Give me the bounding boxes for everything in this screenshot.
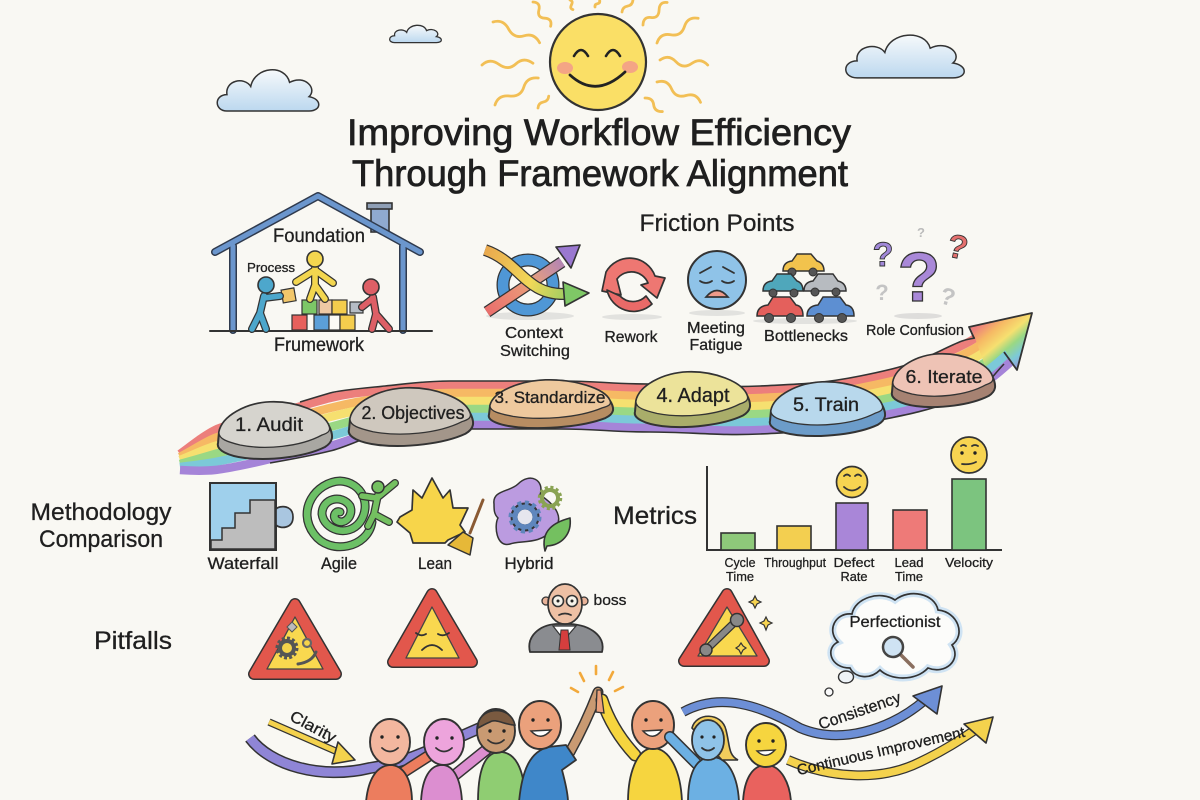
- icon: smiley above defect rate: [836, 466, 868, 498]
- axis labels: Velocity: [945, 555, 994, 570]
- team high five: [366, 666, 791, 800]
- icon: traffic jam cars: [753, 254, 857, 324]
- person: pink: [421, 719, 486, 800]
- callout: perfectionist thought cloud: [825, 594, 959, 696]
- icon: question marks: ?: [875, 280, 889, 305]
- label: rework: Rework: [604, 329, 658, 346]
- heading: pitfalls: Pitfalls: [94, 627, 172, 655]
- label: role confusion: Role Confusion: [866, 322, 964, 339]
- label: agile: Agile: [321, 554, 357, 573]
- axis labels: [724, 555, 994, 584]
- icon: hybrid blob gears and leaf: [494, 478, 570, 551]
- step 1: audit: [218, 402, 332, 459]
- step 6: iterate: 6. Iterate: [906, 367, 982, 387]
- label: meeting fatigue: [687, 320, 745, 354]
- label: context switching: Context: [505, 325, 564, 342]
- house outline: [210, 196, 432, 331]
- car: blue: [807, 297, 854, 322]
- figure: yellow builder: [296, 251, 333, 299]
- step 3: standardize: [489, 380, 613, 428]
- figure: blue builder: [252, 277, 280, 329]
- label: bottlenecks: Bottlenecks: [764, 328, 848, 345]
- heading: foundation: Foundation: [273, 226, 365, 247]
- axis labels: Throughput: [764, 555, 826, 570]
- callout: perfectionist thought cloud: Perfectionist: [850, 614, 941, 631]
- label: context switching: Switching: [500, 343, 570, 360]
- person: orange: [366, 719, 430, 800]
- axis labels: Time: [895, 569, 923, 584]
- icon: agile spiral: [307, 481, 395, 547]
- bar: throughput: [777, 526, 811, 550]
- sparks: [571, 666, 623, 692]
- icon: small cloud: [390, 25, 441, 43]
- title: Improving Workflow Efficiency: [347, 112, 852, 153]
- car: teal: [763, 274, 803, 297]
- axis labels: Rate: [840, 569, 868, 584]
- icon: warning triangle with wrench: [684, 594, 772, 661]
- icon: left cloud: [217, 70, 319, 111]
- block stack: [281, 288, 363, 330]
- arrow: consistency: Consistency: [816, 689, 903, 734]
- icon: context switching: [485, 245, 589, 320]
- step 2: objectives: 2. Objectives: [362, 403, 464, 423]
- icon: smiley above velocity: [951, 437, 987, 473]
- panel: framework house: [210, 196, 432, 356]
- icon: rework: [602, 258, 665, 320]
- step 4: adapt: 4. Adapt: [656, 385, 730, 407]
- icon: lean maple leaf and broom: [397, 478, 483, 555]
- arrow: consistency: [683, 686, 942, 735]
- label: meeting fatigue: Fatigue: [690, 337, 743, 354]
- icon: right cloud: [846, 35, 964, 78]
- person: yellow reaching up: [596, 690, 682, 800]
- icon: boss: [529, 584, 603, 652]
- bar: cycle time: [721, 533, 755, 550]
- label: process: Process: [247, 260, 296, 275]
- person: yellow face red shirt: [743, 723, 791, 800]
- axis labels: Cycle: [724, 555, 756, 570]
- label: hybrid: Hybrid: [504, 554, 554, 573]
- heading: methodology comparison: [30, 499, 172, 553]
- icon: chimney: [367, 203, 392, 232]
- icon: warning triangle with gears: [254, 604, 336, 674]
- title: Through Framework Alignment: [352, 153, 849, 194]
- icon: question marks: ?: [937, 283, 958, 312]
- title: [347, 112, 852, 194]
- car: red: [757, 297, 803, 322]
- step 4: adapt: [635, 372, 750, 427]
- person: green: [477, 709, 525, 800]
- icon: question marks: [873, 225, 971, 319]
- label: meeting fatigue: Meeting: [687, 320, 745, 337]
- label: boss: boss: [594, 592, 626, 609]
- icon: warning triangle with sad face: [393, 594, 472, 662]
- bar: defect rate: [836, 503, 868, 550]
- step 6: iterate: [892, 354, 995, 407]
- heading: methodology comparison: Comparison: [39, 526, 163, 553]
- heading: metrics: Metrics: [613, 502, 697, 530]
- label: lean: Lean: [418, 554, 452, 573]
- figure: red builder: [362, 279, 389, 329]
- person: blue reaching up: [519, 692, 598, 800]
- icon: question marks: ?: [873, 236, 893, 274]
- arrow: purple blue path behind team: [250, 728, 480, 772]
- icon: waterfall puzzle stairs: [210, 483, 293, 550]
- arrow: clarity: [269, 708, 355, 764]
- step 5: train: [770, 382, 885, 436]
- label: waterfall: Waterfall: [208, 554, 278, 573]
- person: blonde in blue: [670, 716, 739, 800]
- car: grey: [804, 274, 846, 296]
- axis labels: Lead: [894, 555, 924, 570]
- rainbow road arrow: [180, 313, 1032, 471]
- bar: lead time: [893, 510, 927, 550]
- icon: question marks: ?: [944, 226, 971, 267]
- step 1: audit: 1. Audit: [235, 415, 304, 436]
- label: frumework: Frumework: [274, 335, 364, 356]
- bar: velocity: [952, 479, 986, 550]
- arrow: continuous improvement: Continuous Improvement: [795, 724, 967, 779]
- heading: methodology comparison: Methodology: [30, 499, 172, 526]
- step 2: objectives: [349, 388, 473, 446]
- step 3: standardize: 3. Standardize: [494, 388, 606, 407]
- axis labels: Defect: [834, 555, 875, 570]
- car: yellow: [783, 254, 824, 276]
- icon: smiling sun: [482, 0, 708, 114]
- icon: question marks: ?: [898, 238, 940, 316]
- arrow: clarity: Clarity: [287, 708, 339, 747]
- bar chart: metrics: [707, 466, 1002, 584]
- heading: friction points: Friction Points: [640, 210, 794, 237]
- icon: question marks: ?: [917, 225, 925, 240]
- label: context switching: [500, 325, 570, 360]
- step 5: train: 5. Train: [793, 395, 859, 416]
- icon: fatigued face: [688, 251, 746, 316]
- axis labels: Time: [726, 569, 754, 584]
